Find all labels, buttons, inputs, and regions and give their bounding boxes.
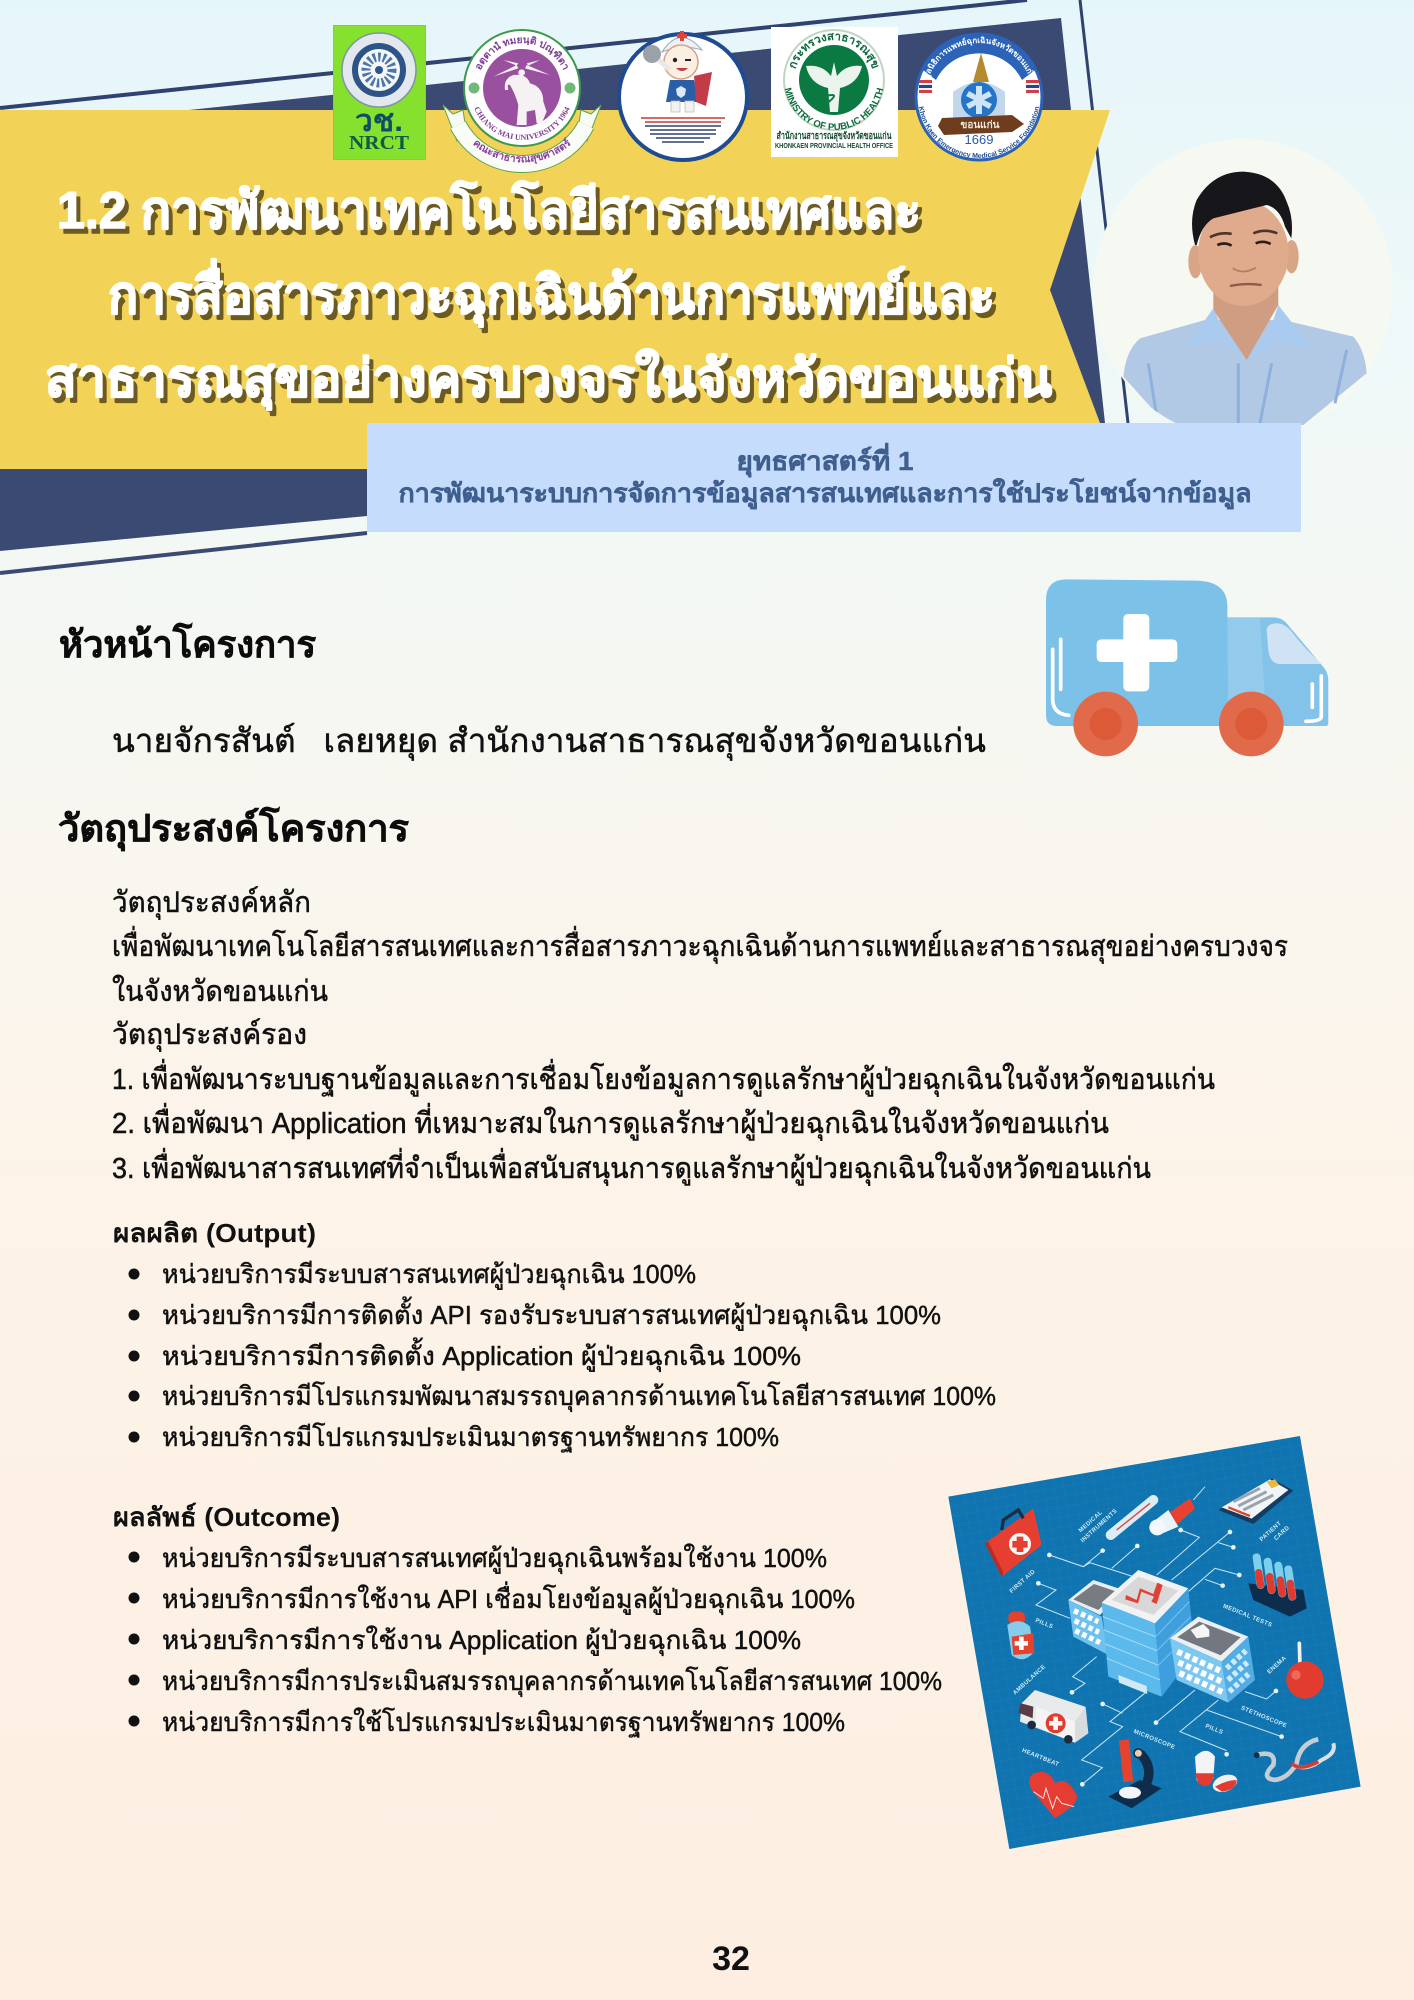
logo: NRCT: NRCT xyxy=(349,132,410,154)
list: outcome: หน่วยบริการมีระบบสารสนเทศผู้ป่วยฉุกเฉินพร้อมใช้งาน 100% xyxy=(162,1543,827,1574)
illustration labels: MEDICAL xyxy=(1078,1510,1104,1534)
capsule pills xyxy=(1195,1751,1240,1795)
right wing xyxy=(1170,1617,1255,1703)
text block: objectives: 1. เพื่อพัฒนาระบบฐานข้อมูลและการเชื่อมโยงข้อมูลการดูแลรักษาผู้ป่วยฉุกเฉินในจังหวัดขอนแก่น xyxy=(112,1059,1215,1097)
pill bottle xyxy=(1007,1612,1034,1659)
logo: Ministry of Public Health: MINISTRY OF PUBLIC HEALTH xyxy=(784,88,884,130)
logo: Khon Kaen EMS foundation: Khon Kaen Emergency Medical Service Foundation xyxy=(918,106,1040,158)
strategy box: การพัฒนาระบบการจัดการข้อมูลสารสนเทศและการใช้ประโยชน์จากข้อมูล xyxy=(398,477,1252,510)
logo: Khon Kaen EMS foundation: มูลนิธิการแพทย์ฉุกเฉินจังหวัดขอนแก่น xyxy=(926,36,1034,76)
list: outcome: ผลลัพธ์ (Outcome) xyxy=(113,1502,340,1532)
title xyxy=(45,179,1052,411)
header banner shapes xyxy=(0,0,1128,573)
stethoscope xyxy=(1254,1739,1334,1780)
title: 1.2 การพัฒนาเทคโนโลยีสารสนเทศและ xyxy=(57,179,921,240)
test tubes xyxy=(1248,1557,1307,1617)
title: สาธารณสุขอย่างครบวงจรในจังหวัดขอนแก่น xyxy=(45,348,1052,411)
logo: Khon Kaen EMS foundation xyxy=(914,32,1044,162)
logo: Khon Kaen EMS foundation: 1669 xyxy=(965,132,993,147)
portrait photo xyxy=(1093,139,1393,439)
illustration labels: CARD xyxy=(1273,1525,1291,1542)
illustration labels: MICROSCOPE xyxy=(1133,1729,1176,1751)
logo: emergency mascot xyxy=(619,31,747,160)
illustration labels: MEDICAL TESTS xyxy=(1222,1604,1273,1629)
logo: Ministry of Public Health xyxy=(771,27,898,157)
illustration labels: ENEMA xyxy=(1267,1655,1288,1675)
strategy box: ยุทธศาสตร์ที่ 1 xyxy=(736,442,914,478)
strategy box xyxy=(367,423,1301,532)
text block: objectives: เพื่อพัฒนาเทคโนโลยีสารสนเทศและการสื่อสารภาวะฉุกเฉินด้านการแพทย์และสาธารณสุขอย่างครบวงจร xyxy=(112,926,1288,964)
main tower xyxy=(1102,1570,1195,1697)
list: outcome: หน่วยบริการมีการใช้โปรแกรมประเมินมาตรฐานทรัพยากร 100% xyxy=(162,1707,845,1738)
list: outcome xyxy=(113,1502,942,1738)
text block: objectives: 2. เพื่อพัฒนา Application ที่เหมาะสมในการดูแลรักษาผู้ป่วยฉุกเฉินในจังหวัดขอนแก่น xyxy=(112,1103,1109,1141)
list: outcome: หน่วยบริการมีการประเมินสมรรถบุคลากรด้านเทคโนโลยีสารสนเทศ 100% xyxy=(162,1666,942,1697)
text block: objectives: วัตถุประสงค์รอง xyxy=(112,1018,307,1052)
text block: objectives: 3. เพื่อพัฒนาสารสนเทศที่จำเป็นเพื่อสนับสนุนการดูแลรักษาผู้ป่วยฉุกเฉินในจังหวัดขอนแก่น xyxy=(112,1148,1151,1186)
text: project lead name: นายจักรสันต์ เลยหยุด สำนักงานสาธารณสุขจังหวัดขอนแก่น xyxy=(112,722,986,761)
illustration labels: STETHOSCOPE xyxy=(1240,1706,1287,1729)
logo: NRCT: วช. xyxy=(355,105,403,138)
logo: Ministry of Public Health: สำนักงานสาธารณสุขจังหวัดขอนแก่น xyxy=(776,130,892,142)
heart xyxy=(1029,1772,1077,1818)
logo: Ministry of Public Health: KHONKAEN PROVINCIAL HEALTH OFFICE xyxy=(775,141,893,150)
logo: Chiang Mai University xyxy=(442,29,602,173)
illustration labels: PATIENT xyxy=(1259,1521,1283,1543)
illustration labels: FIRST AID xyxy=(1009,1569,1037,1595)
logo: Chiang Mai University: อตฺตานํ ทมยนฺติ ปณฺฑิตา xyxy=(476,36,568,70)
list: output: หน่วยบริการมีโปรแกรมประเมินมาตรฐานทรัพยากร 100% xyxy=(162,1422,779,1453)
illustration labels: HEARTBEAT xyxy=(1021,1748,1060,1768)
logo: Chiang Mai University: คณะสาธารณสุขศาสตร์ xyxy=(473,136,570,164)
first aid kit xyxy=(985,1508,1042,1577)
logo: Chiang Mai University: CHIANG MAI UNIVERSITY 1964 xyxy=(475,106,570,140)
text block: objectives: ในจังหวัดขอนแก่น xyxy=(112,974,328,1008)
text block: objectives xyxy=(112,886,1288,1186)
title: การสื่อสารภาวะฉุกเฉินด้านการแพทย์และ xyxy=(108,259,995,328)
logo: Ministry of Public Health: กระทรวงสาธารณสุข xyxy=(790,32,879,69)
list: output: หน่วยบริการมีระบบสารสนเทศผู้ป่วยฉุกเฉิน 100% xyxy=(162,1259,696,1290)
illustration: isometric hospital xyxy=(948,1436,1361,1849)
microscope xyxy=(1108,1740,1162,1808)
list: outcome: หน่วยบริการมีการใช้งาน API เชื่อมโยงข้อมูลผู้ป่วยฉุกเฉิน 100% xyxy=(162,1581,855,1615)
illustration labels xyxy=(1009,1508,1291,1768)
page number: 32 xyxy=(712,1940,750,1978)
heading: project lead: หัวหน้าโครงการ xyxy=(59,622,316,665)
list: output xyxy=(113,1218,996,1453)
ambulance xyxy=(1018,1690,1088,1744)
logo: Khon Kaen EMS foundation: ขอนแก่น xyxy=(960,119,1000,131)
left wing xyxy=(1068,1580,1123,1655)
text block: objectives: วัตถุประสงค์หลัก xyxy=(112,886,311,920)
list: output: หน่วยบริการมีการติดตั้ง Application ผู้ป่วยฉุกเฉิน 100% xyxy=(162,1337,801,1372)
list: output: หน่วยบริการมีการติดตั้ง API รองรับระบบสารสนเทศผู้ป่วยฉุกเฉิน 100% xyxy=(162,1296,941,1331)
connector lines xyxy=(1036,1530,1282,1784)
illustration labels: PILLS xyxy=(1204,1724,1224,1736)
illustration labels: AMBULANCE xyxy=(1012,1664,1047,1696)
list: output: หน่วยบริการมีโปรแกรมพัฒนาสมรรถบุคลากรด้านเทคโนโลยีสารสนเทศ 100% xyxy=(162,1381,996,1412)
icon: ambulance xyxy=(1046,579,1328,756)
logo: NRCT xyxy=(334,26,426,160)
patient card xyxy=(1218,1478,1293,1524)
illustration labels: INSTRUMENTS xyxy=(1080,1508,1119,1544)
list: outcome: หน่วยบริการมีการใช้งาน Application ผู้ป่วยฉุกเฉิน 100% xyxy=(162,1625,801,1656)
heading: objectives: วัตถุประสงค์โครงการ xyxy=(58,806,409,852)
illustration labels: PILLS xyxy=(1034,1618,1054,1630)
enema bulb xyxy=(1286,1643,1324,1699)
list: output: ผลผลิต (Output) xyxy=(113,1218,316,1248)
thermometer and syringe xyxy=(1111,1487,1205,1535)
